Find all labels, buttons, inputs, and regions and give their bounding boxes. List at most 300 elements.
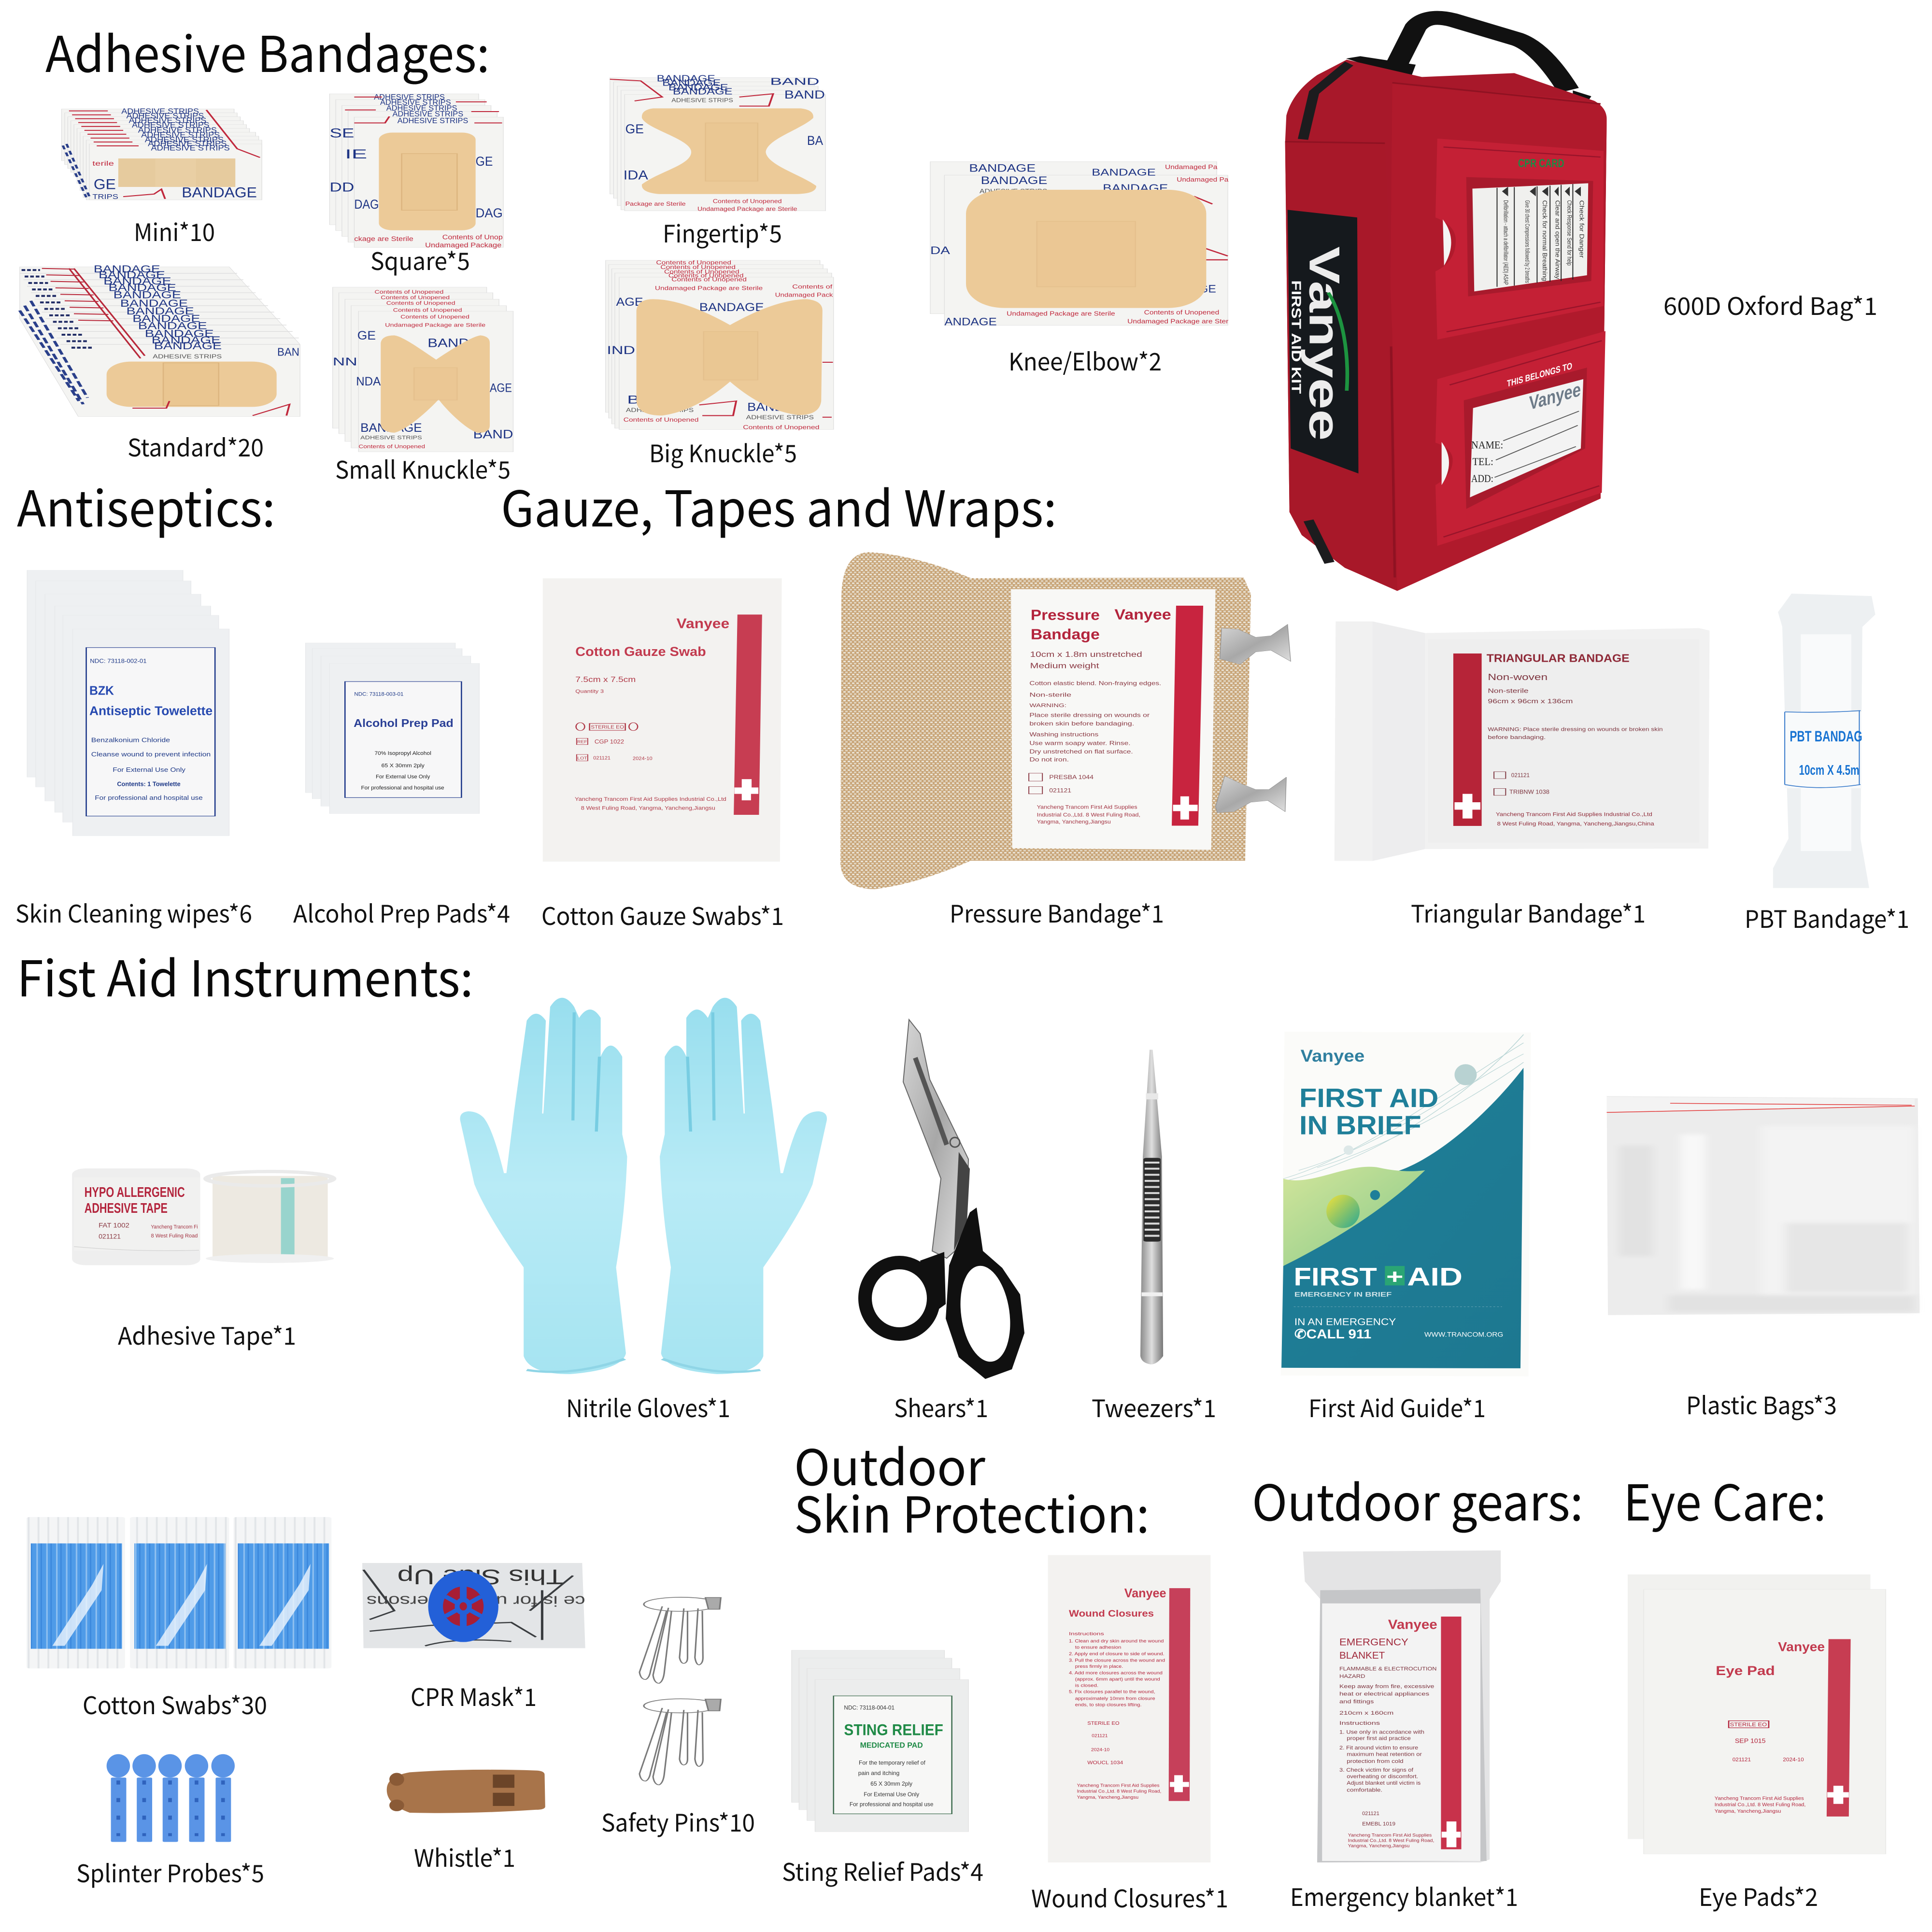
item: standard bandages pack: BANDAGE (103, 275, 171, 287)
item: emergency blanket: BLANKET (1339, 1650, 1385, 1661)
item: fingertip bandages pack: GE (625, 122, 644, 136)
item: knee and elbow bandages pack: Undamaged Pa (1165, 164, 1218, 170)
item: small knuckle bandages pack (333, 287, 513, 452)
item: red 600D oxford first aid bag (1285, 18, 1607, 591)
product card: Dry unstretched on flat surface. (1029, 748, 1133, 755)
item: triangular bandage pack: 8 West Fuling Road, Yangma, Yancheng,Jiangsu,China (1497, 821, 1654, 827)
item: triangular bandage pack: Yancheng Trancom First Aid Supplies Industrial Co.,Ltd (1496, 811, 1652, 817)
item: fingertip bandages pack (610, 73, 825, 212)
item: knee and elbow bandages pack: Contents of Unopened (1144, 309, 1219, 316)
label: Knee/Elbow: Knee/Elbow*2 (1009, 343, 1162, 378)
item: adhesive tape rolls: HYPO ALLERGENIC (85, 1185, 185, 1200)
heading: Gauze, Tapes and Wraps: Gauze, Tapes and Wraps: (501, 470, 1057, 541)
product card: Do not iron. (1029, 756, 1069, 763)
item: square bandages pack (329, 93, 503, 249)
item: emergency blanket: Adjust blanket until victim is (1347, 1780, 1421, 1786)
label: Adhesive Tape: Adhesive Tape*1 (118, 1317, 296, 1352)
item: cotton gauze swabs: 8 West Fuling Road, Yangma, Yancheng,Jiangsu (581, 805, 715, 811)
product card: Yangma, Yancheng,Jiangsu (1037, 819, 1111, 825)
item: first aid guide booklet: FIRST (1294, 1263, 1377, 1291)
right glove (660, 998, 827, 1374)
item: big knuckle bandages pack: BANDAGE (699, 300, 764, 313)
product card: Bandage (1031, 626, 1100, 642)
item: adhesive tape rolls: 8 West Fuling Road (151, 1233, 198, 1239)
item: big knuckle bandages pack: ADHESIVE STRIPS (626, 407, 694, 413)
item: knee and elbow bandages pack: ANDAGE (944, 316, 997, 328)
label: 600D Oxford Bag: 600D Oxford Bag*1 (1663, 287, 1877, 322)
upper pin set (639, 1597, 721, 1683)
item: mini bandages pack: ADHESIVE STRIPS (129, 116, 206, 125)
item: standard bandages pack: BANDAGE (145, 327, 214, 339)
item: standard bandages pack: ADHESIVE STRIPS (153, 353, 222, 360)
CPR card holder: Check for normal Breathing (1541, 200, 1548, 281)
CPR card holder: CPR CARD (1518, 156, 1564, 170)
item: big knuckle bandages pack: Contents of Unopened (660, 264, 736, 270)
item: first aid guide booklet: FIRST AID (1299, 1083, 1438, 1113)
item: emergency blanket: 210cm x 160cm (1339, 1710, 1393, 1716)
label: Big Knuckle: Big Knuckle*5 (649, 435, 797, 469)
item: emergency blanket: Keep away from fire, excessive (1339, 1683, 1434, 1689)
item: standard bandages pack: BANDAGE (120, 297, 188, 309)
heading: Adhesive Bandages: Adhesive Bandages: (45, 15, 490, 86)
item: emergency blanket: Instructions (1339, 1720, 1380, 1726)
item: mini bandages pack: BANDAGE (182, 185, 257, 200)
item: safety pins (639, 1597, 721, 1785)
item: mini bandages pack: GE (94, 176, 116, 192)
item: eye pads: Vanyee (1778, 1640, 1825, 1654)
item: cotton gauze swabs: LOT (577, 756, 587, 760)
heading: Outdoor Skin Protection: Outdoor (794, 1429, 985, 1500)
product card: Place sterile dressing on wounds or (1029, 712, 1150, 718)
product card (1011, 589, 1291, 850)
item: big knuckle bandages pack: BANDAGE (747, 400, 812, 413)
item: sting relief pads (792, 1650, 968, 1832)
item: alcohol prep pads: Alcohol Prep Pad (354, 717, 454, 729)
item: sting relief pads: 65 X 30mm 2ply (870, 1781, 912, 1787)
label: Splinter Probes: Splinter Probes*5 (76, 1855, 264, 1889)
item: knee and elbow bandages pack: Undamaged Package are Ster (1127, 318, 1229, 325)
item: square bandages pack: IE (345, 147, 367, 161)
item: first aid guide booklet: ✆CALL 911 (1294, 1327, 1371, 1341)
item: emergency blanket: 2. Fit around victim to ensure (1339, 1745, 1418, 1750)
item: standard bandages pack: BANDAGE (94, 263, 160, 274)
item: knee and elbow bandages pack: Undamaged Package are Sterile (1007, 310, 1115, 317)
product card: Washing instructions (1029, 731, 1098, 738)
item: emergency blanket: 3. Check victim for signs of (1339, 1767, 1414, 1773)
item: triangular bandage pack: TRIANGULAR BANDAGE (1487, 652, 1630, 665)
item: cotton gauze swabs: STERILE EO (591, 724, 624, 730)
bag body (1285, 60, 1607, 591)
heading: Eye Care: Eye Care: (1623, 1464, 1826, 1535)
item: mini bandages pack: ADHESIVE STRIPS (145, 136, 224, 144)
bag handle (1346, 18, 1591, 101)
item: mini bandages pack: terile (92, 160, 114, 167)
item: small knuckle bandages pack: BAND (427, 336, 469, 350)
item: big knuckle bandages pack: Undamaged Pack (775, 292, 833, 298)
item: eye pads: 021121 (1733, 1757, 1751, 1762)
item: wound closures: 2. Apply end of closure to side of wound. (1069, 1651, 1165, 1656)
item: standard bandages pack (20, 263, 300, 416)
item: sting relief pads: STING RELIEF (844, 1721, 943, 1739)
item: wound closures: WOUCL 1034 (1087, 1760, 1123, 1765)
product card: Cotton elastic blend. Non-fraying edges. (1029, 680, 1161, 686)
name tag holder: THIS BELONGS TO (1507, 360, 1572, 389)
item: standard bandages pack: BANDAGE (154, 340, 222, 352)
item: cotton gauze swabs: 2024-10 (633, 755, 653, 761)
item: small knuckle bandages pack: Contents of Unopened (381, 294, 450, 300)
product card: Use warm soapy water. Rinse. (1029, 740, 1131, 746)
item: small knuckle bandages pack: Contents of Unopened (393, 307, 462, 313)
heading: Outdoor gears: Outdoor gears: (1252, 1464, 1583, 1535)
item: square bandages pack: ADHESIVE STRIPS (380, 98, 451, 107)
item: fingertip bandages pack: ADHESIVE STRIPS (671, 97, 733, 103)
item: alcohol prep pads: 65 X 30mm 2ply (382, 763, 425, 768)
item: cotton gauze swabs: Cotton Gauze Swab (575, 644, 706, 659)
item: wound closures: press firmly in place. (1075, 1664, 1123, 1669)
item: standard bandages pack: BANDAGE (126, 305, 194, 316)
product card: Medium weight (1030, 662, 1099, 670)
decorative wave lines (1283, 1035, 1523, 1181)
item: small knuckle bandages pack: NN (333, 356, 357, 368)
item: skin cleaning wipes: BZK (89, 684, 114, 697)
item: alcohol prep pads: For External Use Only (376, 774, 430, 780)
item: adhesive tape rolls (72, 1168, 334, 1265)
item: square bandages pack: Undamaged Package (425, 242, 501, 249)
CPR card holder: Clear and open the Airway (1554, 200, 1561, 280)
item: big knuckle bandages pack: Contents of Unopened (624, 416, 698, 423)
item: standard bandages pack: BAN (277, 346, 299, 358)
item: triangular bandage pack: before bandaging. (1488, 734, 1546, 740)
label: Plastic Bags: Plastic Bags*3 (1686, 1387, 1837, 1421)
label: Tweezers: Tweezers*1 (1092, 1390, 1216, 1424)
item: eye pads: Yangma, Yancheng,Jiangsu (1715, 1809, 1781, 1814)
item: fingertip bandages pack: IDA (624, 168, 648, 183)
item: small knuckle bandages pack: BANDAGE (360, 421, 422, 435)
item: small knuckle bandages pack: Contents of Unopened (386, 299, 455, 306)
CPR card holder: Check Response Send for help (1565, 200, 1573, 266)
item: standard bandages pack: BANDAGE (108, 282, 176, 293)
label: Triangular Bandage: Triangular Bandage*1 (1411, 895, 1646, 930)
item: emergency blanket: heat or electrical appliances (1339, 1691, 1429, 1697)
item: triangular bandage pack: Non-sterile (1488, 687, 1529, 695)
item: first aid guide booklet: AID (1407, 1263, 1463, 1291)
item: knee and elbow bandages pack: BANDAGE (981, 174, 1047, 186)
item: wound closures: 1. Clean and dry skin around the wound (1069, 1638, 1164, 1644)
text: Antiseptic Towelette (89, 704, 213, 718)
item: cotton gauze swabs: CGP 1022 (595, 739, 624, 745)
label: Mini: Mini*10 (134, 213, 215, 248)
item: eye pads: 2024-10 (1783, 1757, 1804, 1762)
item: big knuckle bandages pack (606, 259, 834, 430)
text: AGE (490, 381, 512, 395)
label: Cotton Swabs: Cotton Swabs*30 (83, 1687, 267, 1721)
product card: Pressure (1031, 607, 1100, 623)
CPR card holder: Check for Danger (1578, 200, 1585, 258)
item: big knuckle bandages pack: Contents of Unopened (656, 259, 731, 266)
logo patch (1288, 210, 1358, 473)
item: knee and elbow bandages pack: DA (930, 245, 950, 256)
product card: WARNING: (1029, 702, 1066, 709)
item: square bandages pack: ADHESIVE STRIPS (374, 93, 445, 101)
item: mini bandages pack: ADHESIVE STRIPS (132, 121, 210, 129)
item: standard bandages pack: BANDAGE (138, 320, 207, 331)
item: cotton gauze swabs: REF (577, 740, 587, 744)
item: first aid guide booklet: EMERGENCY IN BRIEF (1294, 1291, 1392, 1298)
item: cotton gauze swabs: Yancheng Trancom First Aid Supplies Industrial Co.,Ltd (575, 796, 726, 802)
item: emergency blanket: Vanyee (1388, 1617, 1437, 1632)
name tag holder: ADD: (1471, 472, 1493, 484)
item: sting relief pads: pain and itching (858, 1770, 899, 1776)
item: square bandages pack: DD (329, 180, 354, 194)
item: fingertip bandages pack: BAND (784, 88, 825, 101)
name tag holder: NAME: (1471, 439, 1503, 451)
boxed tape: FAT 1002 (99, 1222, 129, 1229)
open tape (206, 1171, 334, 1263)
item: triangular bandage pack (1335, 622, 1710, 861)
label: Wound Closures: Wound Closures*1 (1031, 1880, 1228, 1915)
item: wound closures (1048, 1555, 1210, 1862)
item: wound closures: to ensure adhesion (1075, 1645, 1121, 1650)
item: cotton gauze swabs: Vanyee (676, 616, 729, 631)
item: fingertip bandages pack: BAND (770, 76, 819, 87)
item: sting relief pads: For the temporary relief of (859, 1760, 925, 1766)
item: wound closures: Wound Closures (1069, 1608, 1154, 1619)
item: mini bandages pack: ADHESIVE STRIPS (148, 140, 227, 148)
item: cotton gauze swabs: Quantity 3 (575, 689, 604, 694)
item: small knuckle bandages pack: GE (357, 329, 376, 342)
item: emergency blanket: 1. Use only in accordance with (1339, 1729, 1424, 1735)
item: trauma shears (865, 1020, 1024, 1379)
item: emergency blanket: HAZARD (1339, 1673, 1365, 1679)
heading: Antiseptics: Antiseptics: (17, 470, 275, 541)
item: big knuckle bandages pack: Undamaged Package are Sterile (655, 284, 763, 291)
label: Fingertip: Fingertip*5 (663, 215, 782, 250)
item: wound closures: 2024-10 (1091, 1747, 1109, 1752)
item: square bandages pack: DAG (354, 197, 379, 212)
label: PBT Bandage: PBT Bandage*1 (1745, 900, 1909, 935)
item: big knuckle bandages pack: Contents of Unopened (668, 272, 744, 279)
product card: 10cm x 1.8m unstretched (1030, 651, 1142, 659)
item: sting relief pads: For External Use Only (864, 1791, 919, 1798)
item: mini bandages pack: ADHESIVE STRIPS (141, 131, 220, 140)
item: fingertip bandages pack: BA (807, 133, 824, 148)
item: alcohol prep pads: 70% Isopropyl Alcohol (375, 750, 431, 756)
item: wound closures: approximately 10mm from closure (1075, 1696, 1155, 1701)
item: knee and elbow bandages pack: Undamaged Pa (1177, 176, 1229, 183)
name tag holder (1435, 331, 1605, 546)
item: eye pads: Yancheng Trancom First Aid Supplies (1715, 1796, 1804, 1801)
item: square bandages pack: Contents of Unop (442, 234, 503, 241)
item: small knuckle bandages pack: Contents of Unopened (375, 288, 443, 295)
item: fingertip bandages pack: BANDAGE (657, 73, 715, 84)
item: fingertip bandages pack: Contents of Unopened (713, 198, 782, 204)
item: wound closures: Instructions (1069, 1632, 1104, 1636)
item: first aid guide booklet: WWW.TRANCOM.ORG (1424, 1331, 1503, 1338)
item: plastic zip bags (1607, 1096, 1919, 1315)
item: emergency blanket: EMERGENCY (1339, 1636, 1408, 1648)
item: mini bandages pack (62, 107, 262, 200)
item: skin cleaning wipes: Cleanse wound to prevent infection (91, 751, 211, 758)
label: Sting Relief Pads: Sting Relief Pads*4 (782, 1853, 983, 1888)
label: Eye Pads: Eye Pads*2 (1699, 1878, 1818, 1913)
label: Small Knuckle: Small Knuckle*5 (335, 451, 511, 486)
item: small knuckle bandages pack: Undamaged Package are Sterile (385, 322, 485, 328)
label: Nitrile Gloves: Nitrile Gloves*1 (566, 1390, 730, 1424)
item: cotton gauze swabs (543, 578, 782, 862)
name tag holder: TEL: (1472, 455, 1493, 468)
item: wound closures: is closed. (1075, 1683, 1098, 1688)
item: emergency blanket: and fittings (1339, 1699, 1374, 1705)
left glove (460, 998, 627, 1374)
heading: Outdoor Skin Protection: Skin Protection: (794, 1476, 1150, 1547)
item: fingertip bandages pack: Package are Sterile (625, 200, 686, 207)
item: CPR mask (362, 1563, 585, 1648)
label: Pressure Bandage: Pressure Bandage*1 (950, 895, 1164, 930)
product card: 021121 (1049, 787, 1071, 794)
item: mini bandages pack: ADHESIVE STRIPS (126, 112, 204, 120)
item: wound closures: 021121 (1092, 1733, 1108, 1738)
CPR card holder: Give 30 chest Compressions followed by 2 breaths (1524, 200, 1531, 283)
item: emergency blanket: 021121 (1362, 1810, 1379, 1816)
item: tweezers (1140, 1050, 1163, 1364)
item: standard bandages pack: BANDAGE (99, 269, 165, 280)
item: wound closures: STERILE EO (1087, 1721, 1120, 1726)
item: first aid guide booklet: IN AN EMERGENCY (1294, 1316, 1396, 1327)
item: sting relief pads: NDC: 73118-004-01 (844, 1705, 895, 1711)
item: alcohol prep pads: For professional and hospital use (361, 785, 444, 791)
handles (865, 1263, 934, 1334)
item: mini bandages pack: TRIPS (92, 193, 118, 200)
product card: Industrial Co.,Ltd. 8 West Fuling Road, (1037, 812, 1140, 818)
item: first aid guide booklet: Vanyee (1301, 1046, 1364, 1065)
item: cotton swabs packs (27, 1517, 331, 1668)
CPR card holder: Defibrillation - attach a defibrillator (AED) ASAP (1502, 200, 1509, 285)
item: big knuckle bandages pack: Contents of Unopened (664, 268, 739, 275)
item: triangular bandage pack: TRIBNW 1038 (1509, 789, 1549, 795)
name tag holder: Vanyee (1529, 378, 1581, 414)
label: Standard: Standard*20 (128, 429, 264, 464)
item: big knuckle bandages pack: Contents of Unopened (743, 424, 819, 430)
product card: Vanyee (1114, 606, 1171, 623)
item: wound closures: Industrial Co.,Ltd. 8 West Fuling Road, (1077, 1789, 1161, 1794)
item: small knuckle bandages pack: ADHESIVE STRIPS (360, 434, 422, 440)
item: triangular bandage pack: 96cm x 96cm x 136cm (1488, 697, 1573, 705)
item: fingertip bandages pack: BANDAGE (662, 78, 721, 88)
item: small knuckle bandages pack: Contents of Unopened (358, 443, 425, 450)
bandage roll (840, 552, 1251, 889)
item: eye pads: Industrial Co.,Ltd. 8 West Fuling Road, (1715, 1803, 1806, 1807)
item: adhesive tape rolls: ADHESIVE TAPE (85, 1200, 168, 1216)
blue valve (428, 1571, 498, 1642)
item: fingertip bandages pack: Undamaged Package are Sterile (697, 205, 797, 212)
item: emergency blanket: FLAMMABLE & ELECTROCUTION (1339, 1666, 1436, 1672)
item: square bandages pack: ADHESIVE STRIPS (392, 110, 463, 118)
item: skin cleaning wipes: Benzalkonium Chloride (91, 737, 170, 744)
item: wound closures: Vanyee (1124, 1586, 1166, 1600)
item: wound closures: 3. Pull the closure across the wound and (1069, 1658, 1165, 1663)
label: Square: Square*5 (370, 242, 470, 277)
boxed tape: 021121 (99, 1233, 121, 1240)
item: fingertip bandages pack: BANDAGE (673, 86, 733, 97)
item: PBT bandage (1773, 594, 1875, 888)
item: triangular bandage pack: 021121 (1511, 772, 1530, 779)
item: emergency blanket: Yangma, Yancheng,Jiangsu (1348, 1844, 1409, 1848)
item: mini bandages pack: ADHESIVE STRIPS (121, 107, 199, 116)
item: emergency blanket: maximum heat retention or (1347, 1751, 1422, 1757)
item: sting relief pads: For professional and hospital use (850, 1801, 933, 1808)
item: eye pads: STERILE EO (1730, 1721, 1767, 1728)
item: knee and elbow bandages pack: ADHESIVE STRIPS (980, 188, 1047, 195)
item: big knuckle bandages pack: IND (607, 344, 635, 356)
item: square bandages pack: ADHESIVE STRIPS (398, 116, 468, 125)
item: eye pads (1628, 1575, 1886, 1854)
item: first aid guide booklet (1281, 1032, 1531, 1377)
label: Safety Pins: Safety Pins*10 (601, 1804, 755, 1839)
label: First Aid Guide: First Aid Guide*1 (1308, 1390, 1486, 1424)
item: eye pads: Eye Pad (1716, 1663, 1775, 1678)
item: CPR mask: ce is for use on persons (367, 1593, 585, 1609)
item: big knuckle bandages pack: Contents of (792, 283, 833, 290)
item: small knuckle bandages pack: NDA (356, 375, 381, 388)
item: triangular bandage pack: WARNING: Place sterile dressing on wounds or broken skin (1488, 726, 1663, 732)
item: wound closures: 4. Add more closures across the wound (1069, 1670, 1163, 1676)
item: eye pads: SEP 1015 (1735, 1737, 1766, 1745)
item: small knuckle bandages pack: Contents of Unopened (400, 313, 469, 320)
item: pressure bandage roll with card and clips (840, 552, 1291, 889)
item: first aid guide booklet: IN BRIEF (1299, 1110, 1421, 1140)
item: wound closures: (approx. 6mm apart) until the wound (1075, 1677, 1160, 1682)
item: mini bandages pack: ADHESIVE STRIPS (138, 126, 217, 134)
item: cotton gauze swabs: 7.5cm x 7.5cm (575, 676, 636, 684)
item: cotton gauze swabs: 021121 (593, 755, 611, 761)
item: emergency blanket: EMEBL 1019 (1362, 1821, 1395, 1827)
item: fingertip bandages pack: BANDAGE (668, 82, 728, 92)
item: mini bandages pack: ADHESIVE STRIPS (151, 144, 230, 152)
item: emergency blanket: overheating or discomfort. (1347, 1774, 1418, 1779)
item: skin cleaning wipes (27, 570, 229, 836)
item: whistle (387, 1770, 545, 1813)
blades (903, 1020, 968, 1258)
CPR card holder (1435, 139, 1604, 340)
item: knee and elbow bandages pack: BANDAGE (1103, 182, 1168, 194)
item: big knuckle bandages pack: ADHESIVE STRIPS (746, 414, 814, 420)
label: Cotton Gauze Swabs: Cotton Gauze Swabs*1 (541, 897, 784, 932)
item: square bandages pack: SE (329, 126, 354, 140)
item: skin cleaning wipes: For professional and hospital use (95, 794, 203, 801)
item: first aid guide booklet: + (1386, 1266, 1404, 1288)
item: knee and elbow bandages pack: BANDAGE (969, 162, 1036, 174)
item: skin cleaning wipes: Contents: 1 Towelette (117, 781, 181, 788)
item: alcohol prep pads: NDC: 73118-003-01 (354, 691, 403, 697)
boxed tape (72, 1168, 200, 1265)
item: emergency blanket: Yancheng Trancom First Aid Supplies (1348, 1833, 1432, 1838)
item: knee and elbow bandages pack: BANDAGE (1092, 167, 1156, 178)
item: square bandages pack: ckage are Sterile (354, 236, 413, 242)
item: emergency blanket (1303, 1550, 1501, 1862)
item: emergency blanket: comfortable. (1347, 1787, 1382, 1793)
label: Whistle: Whistle*1 (414, 1839, 515, 1874)
item: square bandages pack: GE (476, 154, 493, 169)
item: emergency blanket: Industrial Co.,Ltd. 8 West Fuling Road, (1348, 1838, 1434, 1843)
product card: broken skin before bandaging. (1029, 720, 1134, 727)
label: Emergency blanket: Emergency blanket*1 (1290, 1878, 1518, 1913)
product card: Yancheng Trancom First Aid Supplies (1037, 804, 1137, 810)
item: sting relief pads: MEDICATED PAD (860, 1741, 923, 1749)
item: splinter probes (107, 1754, 235, 1842)
item: skin cleaning wipes: NDC: 73118-002-01 (90, 657, 147, 664)
lower pin set (639, 1699, 721, 1785)
item: wound closures: 5. Fix closures parallel to the wound, (1069, 1690, 1155, 1694)
